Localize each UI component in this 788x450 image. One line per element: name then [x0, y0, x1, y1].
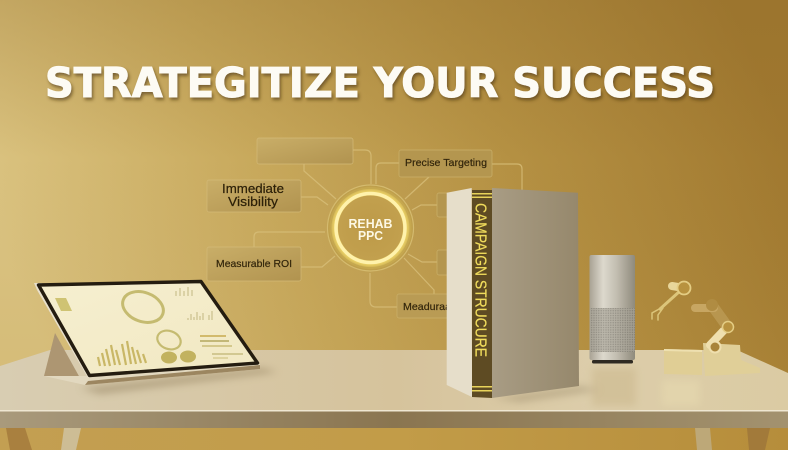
- small cube: [664, 349, 702, 375]
- book cover: [492, 188, 579, 398]
- robot arm segments: [652, 286, 727, 345]
- document icon: [55, 298, 72, 311]
- speaker body: [590, 255, 635, 360]
- small bar charts: [176, 287, 212, 320]
- box: immediate visibility: Visibility: [228, 195, 279, 209]
- box: immediate visibility: Immediate: [222, 182, 284, 196]
- hub label: REHAB: [348, 217, 392, 231]
- spine title: CAMPAIGN STRUCURE: [472, 203, 488, 357]
- dashboard charts: [98, 286, 243, 366]
- speaker: [590, 255, 635, 364]
- box: immediate visibility: [207, 180, 301, 212]
- tablet stand: [44, 333, 80, 378]
- table: [0, 350, 788, 428]
- box: meaduraa: Meaduraa: [403, 301, 451, 313]
- speaker grille: [590, 308, 635, 352]
- main donut: [118, 286, 168, 328]
- tablet pale edge: [34, 283, 92, 378]
- tablet screen and bezel: [38, 282, 258, 376]
- small discs: [161, 350, 196, 364]
- book pages side: [447, 188, 472, 397]
- book: [447, 188, 600, 402]
- list lines: [200, 336, 243, 358]
- box: meaduraa: [397, 294, 451, 318]
- robotic arm: [652, 282, 760, 376]
- small donut: [155, 327, 183, 353]
- hub label: [348, 217, 392, 243]
- bar chart: [98, 341, 146, 366]
- blank box: [257, 138, 353, 164]
- title: STRATEGITIZE YOUR SUCCESS: [45, 59, 715, 107]
- mind map diagram: [207, 138, 522, 318]
- book shadow: [493, 386, 600, 402]
- box: precise targeting: Precise Targeting: [405, 157, 487, 169]
- robot base: [703, 343, 760, 376]
- connector lines: [254, 150, 522, 307]
- central hub: [328, 185, 414, 271]
- book spine: [472, 190, 492, 398]
- tablet: [34, 282, 278, 394]
- partial box upper right: [437, 193, 451, 217]
- speaker base: [592, 360, 633, 364]
- box: measurable ROI: [207, 247, 301, 281]
- box: measurable ROI: Measurable ROI: [216, 258, 292, 270]
- table legs: [6, 428, 770, 450]
- tablet base: [44, 364, 260, 385]
- box: precise targeting: [399, 150, 492, 177]
- tablet shadow: [80, 368, 278, 394]
- partial box lower right: [437, 250, 451, 275]
- robot joints: [678, 282, 734, 352]
- hub label: PPC: [358, 229, 383, 243]
